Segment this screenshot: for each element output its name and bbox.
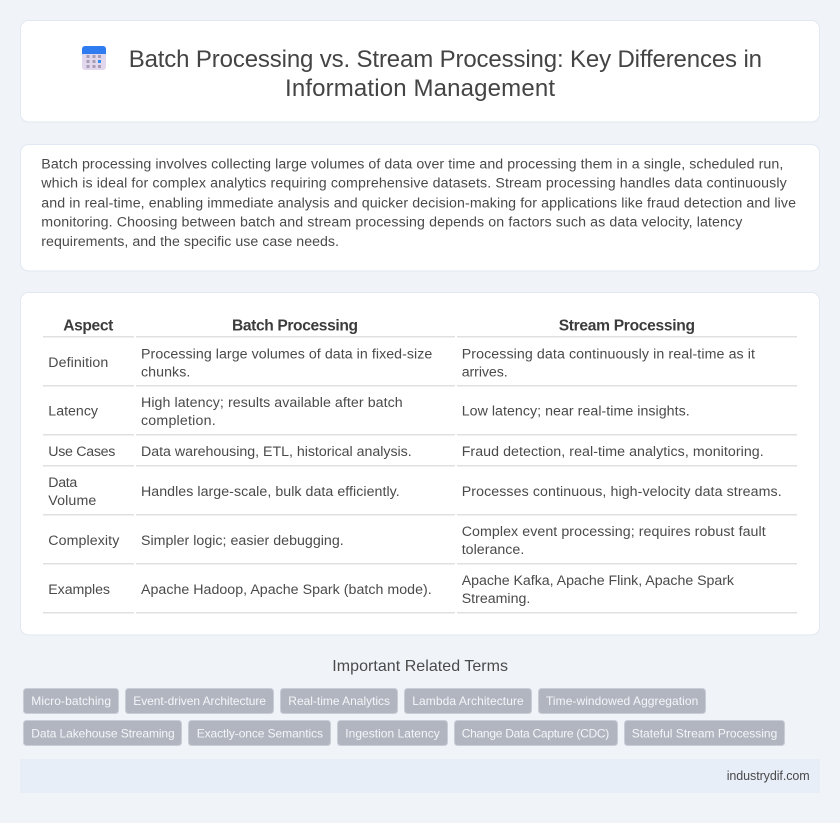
heading: important related terms: Important Related Terms [332, 658, 508, 675]
row: latency [48, 395, 690, 429]
row: complexity: tolerance. [462, 542, 524, 558]
table header row: Aspect [63, 318, 113, 335]
text block: introduction paragraph: and in real-time, enabling immediate analysis and quicker decision-making for applications like fraud detection and live [41, 195, 796, 211]
icon: calendar [82, 46, 106, 70]
panel: title card [20, 20, 820, 122]
table header row [63, 318, 695, 335]
row: data volume [48, 475, 782, 509]
text block: introduction paragraph: requirements, and the specific use case needs. [41, 234, 339, 250]
footer: industrydif.com [727, 769, 810, 783]
row: complexity: Simpler logic; easier debugging. [141, 533, 344, 549]
title: Batch Processing vs. Stream Processing: Key Differences in [129, 46, 762, 73]
text block: introduction paragraph: Batch processing involves collecting large volumes of data over time and processing them in a single, scheduled run, [41, 156, 783, 172]
row: latency: Latency [48, 404, 99, 420]
row: use cases: Use Cases [48, 444, 115, 460]
panel: related term tags: Time-windowed Aggregation [546, 694, 698, 708]
panel: related term tags: Lambda Architecture [412, 694, 524, 708]
row: use cases: Fraud detection, real-time analytics, monitoring. [462, 444, 764, 460]
row: latency: completion. [141, 413, 216, 429]
row: data volume: Data [48, 475, 77, 491]
title: Information Management [285, 75, 555, 102]
row: complexity: Complex event processing; requires robust fault [462, 524, 766, 540]
row: latency: Low latency; near real-time insights. [462, 404, 690, 420]
row: data volume: Processes continuous, high-velocity data streams. [462, 484, 782, 500]
text block: introduction paragraph: which is ideal for complex analytics requiring comprehensive datasets. Stream processing handles data continuously [40, 176, 788, 192]
row: definition [48, 346, 755, 380]
panel: related term tags: Event-driven Architecture [133, 694, 266, 708]
row: definition: Processing data continuously in real-time as it [462, 346, 755, 362]
panel: related term tags: Micro-batching [31, 694, 111, 708]
footer [20, 759, 820, 793]
row: definition: arrives. [462, 364, 508, 380]
panel: related term tags: Ingestion Latency [345, 726, 440, 740]
row: definition: Definition [48, 355, 108, 371]
row: complexity: Complexity [48, 533, 120, 549]
table header row: Batch Processing [232, 318, 358, 335]
panel: related term tags: Real-time Analytics [288, 694, 390, 708]
panel: related term tags [24, 688, 784, 746]
row: use cases: Data warehousing, ETL, historical analysis. [141, 444, 412, 460]
table header row: Stream Processing [559, 318, 695, 335]
row: examples [48, 573, 735, 607]
text block: introduction paragraph [40, 156, 796, 250]
row: data volume: Volume [48, 493, 96, 509]
text block: introduction paragraph: monitoring. Choosing between batch and stream processing depends on factors such as data velocity, latency [41, 214, 743, 230]
panel: introduction [20, 144, 820, 271]
row: examples: Apache Hadoop, Apache Spark (batch mode). [141, 582, 432, 598]
title [129, 46, 762, 102]
panel: related term tags: Stateful Stream Processing [632, 726, 777, 740]
panel: related term tags: Change Data Capture (CDC) [462, 726, 609, 740]
row: definition: Processing large volumes of data in fixed-size [141, 346, 432, 362]
row: definition: chunks. [141, 364, 190, 380]
panel: comparison table [20, 292, 820, 635]
row: use cases [48, 444, 764, 460]
panel: related term tags: Exactly-once Semantics [197, 726, 323, 740]
row: examples: Apache Kafka, Apache Flink, Apache Spark [462, 573, 735, 589]
row: examples: Streaming. [462, 591, 530, 607]
row: latency: High latency; results available after batch [141, 395, 403, 411]
row: data volume: Handles large-scale, bulk data efficiently. [141, 484, 400, 500]
panel: related term tags: Data Lakehouse Streaming [31, 726, 175, 740]
row: examples: Examples [48, 582, 110, 598]
row: complexity [48, 524, 766, 558]
